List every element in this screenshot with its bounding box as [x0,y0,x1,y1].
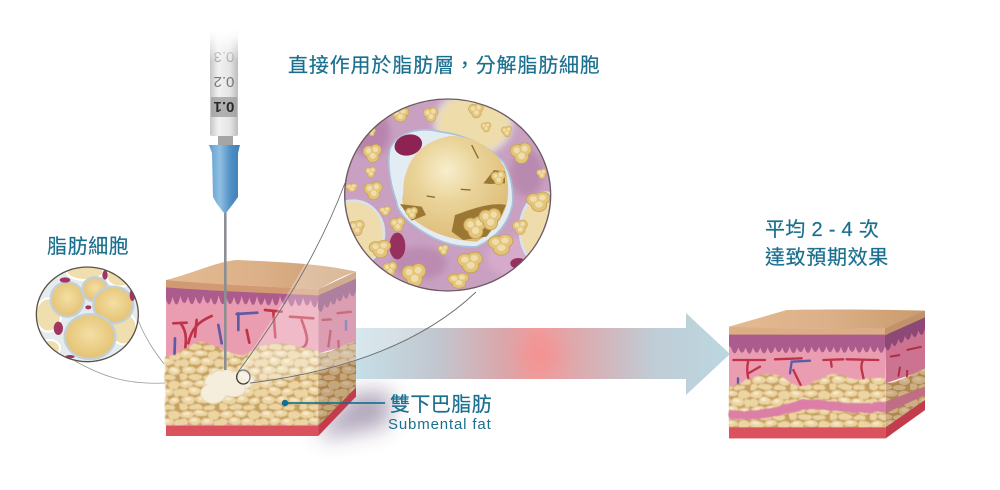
label: submental fat Chinese: 雙下巴脂肪 [390,393,492,416]
label: submental fat English: Submental fat [388,416,492,433]
torn membrane cracks [452,204,506,240]
syringe [205,28,243,213]
central lipid droplet [402,136,508,242]
fibrous band [729,399,886,419]
syringe scale labels: 0.2 [214,73,234,90]
cell membrane [389,130,513,247]
syringe scale labels: 0.1 [214,98,234,115]
top surface [166,260,356,289]
blood vessels [733,358,878,394]
small circle outline [36,267,138,362]
front face [166,280,318,436]
heading: direct action: 直接作用於脂肪層，分解脂肪細胞 [288,54,601,77]
released lipid blobs [345,103,550,289]
dissolved fat area [201,369,253,403]
needle hub [209,145,240,213]
small circle leader lines [75,320,165,383]
front face [729,327,885,438]
top surface [729,310,925,329]
circle outline [345,99,551,291]
main fat cells [51,277,133,359]
skin cube before treatment [165,260,356,436]
purple tissue [345,100,550,290]
syringe scale labels: 0.3 [214,48,234,65]
magnified fat cell [344,98,552,292]
blue vessels [738,361,854,392]
label: fat cells: 脂肪細胞 [47,235,129,258]
muscle layer [166,426,318,436]
dark red nuclei [389,233,405,259]
muscle layer [729,427,886,438]
cube shadow [318,392,392,438]
label: desired effect: 達致預期效果 [765,246,889,269]
right face [318,272,356,436]
skin cube after treatment [729,310,925,438]
background cells [36,263,137,357]
fat cells magnified view [36,266,139,362]
needle [224,210,227,370]
magnifier leader lines [238,183,476,383]
syringe scale labels [214,48,234,115]
arrow [355,313,730,395]
leader line: submental fat [282,400,385,406]
fat layer [165,342,319,425]
fat layer [729,373,886,428]
blue vessels [174,313,257,362]
focus ring [237,370,250,384]
label: sessions: 平均 2 - 4 次 [765,218,879,241]
right face [885,311,925,438]
blood vessels [173,310,313,363]
neighbouring fat cells [435,92,512,155]
light beam to magnified view [237,185,551,384]
red nuclei [54,270,135,358]
